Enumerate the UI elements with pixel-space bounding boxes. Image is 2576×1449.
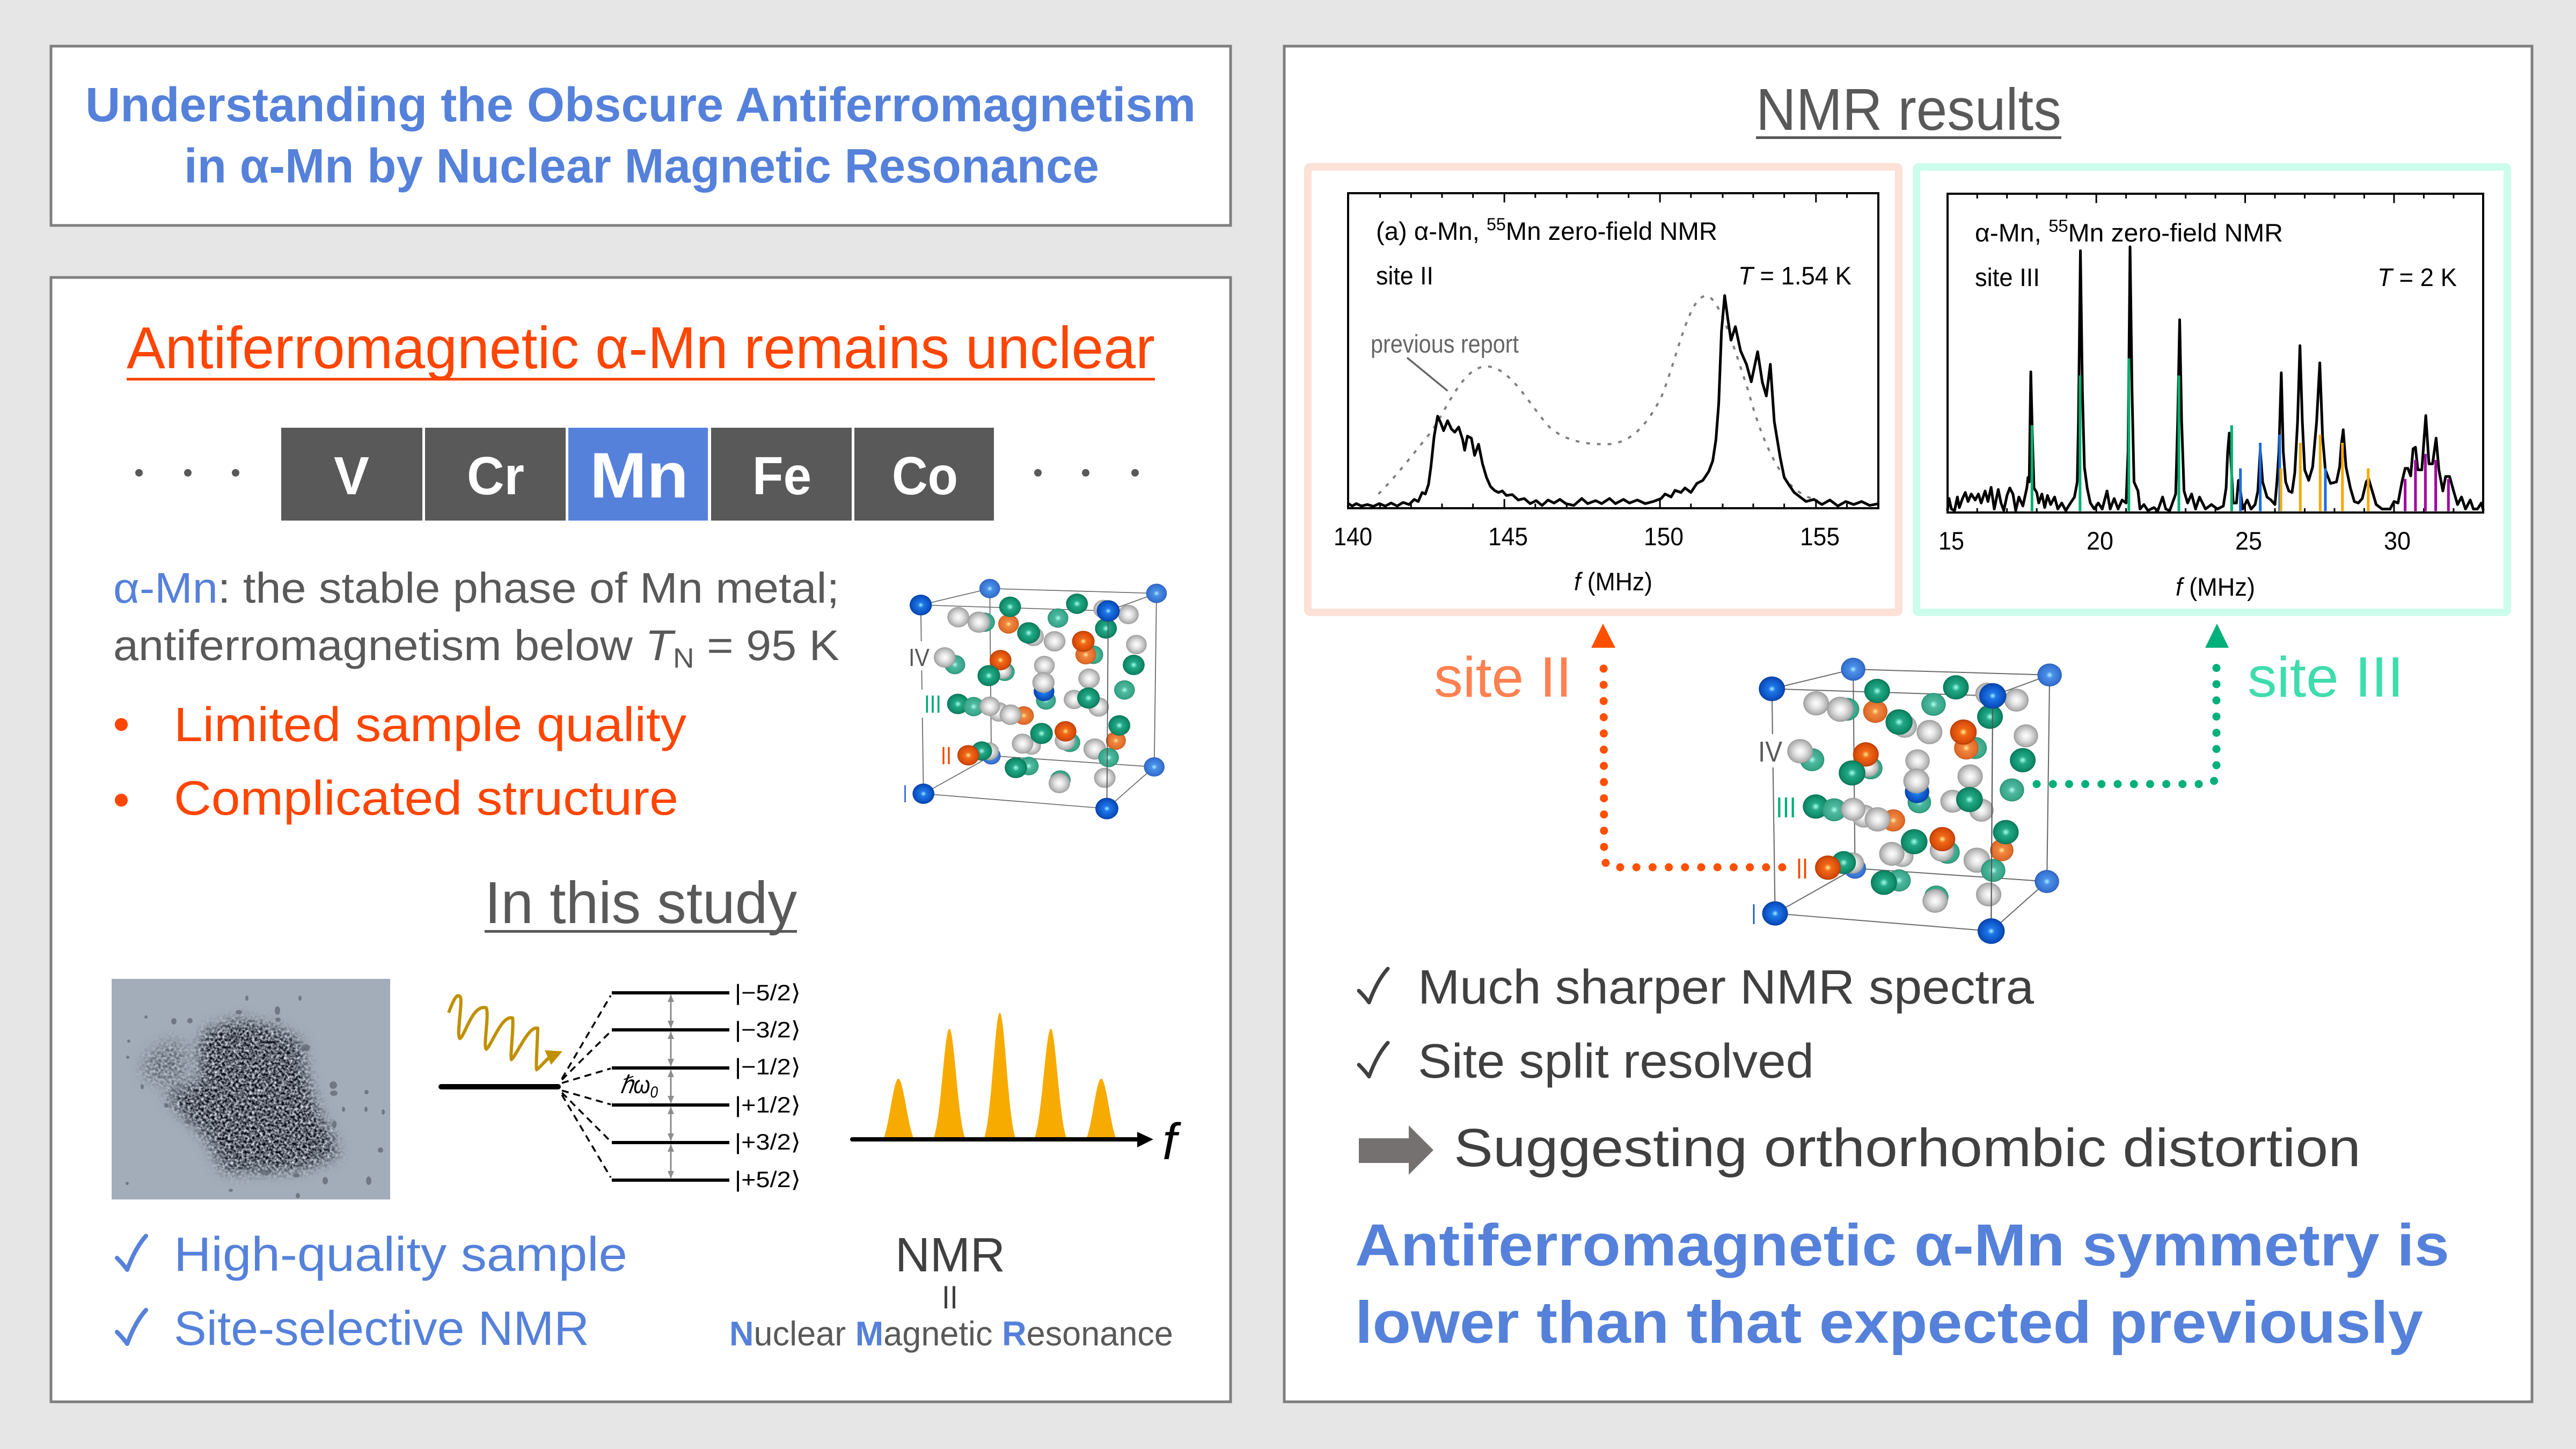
checklist: methods bbox=[117, 1228, 627, 1356]
arrow: site II to spectrum bbox=[1591, 624, 1782, 867]
dashed split lines bbox=[562, 996, 611, 1177]
arrow: conclusion bbox=[1359, 1125, 1433, 1175]
text: NMR definition: Nuclear Magnetic Resonance bbox=[729, 1314, 1173, 1353]
chart: site II spectrum: 140 bbox=[1334, 522, 1372, 551]
crystal structure: large: III bbox=[1776, 792, 1796, 824]
panel: background and study bbox=[51, 277, 1231, 1402]
calculated lines bbox=[2032, 358, 2448, 511]
text: alpha-Mn description: = 95 K bbox=[694, 621, 839, 669]
periodic table row: Fe bbox=[752, 446, 811, 506]
chart: site II spectrum: site II bbox=[1376, 261, 1433, 290]
text: alpha-Mn description bbox=[113, 564, 839, 674]
heading: title text: Understanding the Obscure Antiferromagnetism bbox=[85, 78, 1196, 132]
periodic table row: Cr bbox=[467, 446, 524, 506]
plot frame bbox=[1948, 194, 2483, 513]
chart: site II spectrum bbox=[1334, 193, 1879, 596]
chart: site III spectrum: f (MHz) bbox=[2176, 573, 2255, 601]
chart: site II spectrum: previous report bbox=[1371, 330, 1519, 358]
chart: NMR quintet peaks bbox=[850, 1013, 1181, 1170]
labels: spin states: |+3/2⟩ bbox=[735, 1129, 801, 1154]
text: alpha-Mn description: α-Mn: the stable phase of Mn metal; bbox=[113, 564, 839, 612]
checklist: results: Site split resolved bbox=[1418, 1035, 1814, 1088]
labels: spin states: |−3/2⟩ bbox=[735, 1017, 801, 1042]
chart: site III spectrum: Mn zero-field NMR bbox=[2068, 218, 2283, 247]
main level bbox=[438, 1084, 561, 1089]
chart: site II spectrum: (a) α-Mn, bbox=[1376, 217, 1479, 245]
label: site III: site III bbox=[2248, 646, 2404, 709]
crystal structure: small bbox=[903, 579, 1167, 819]
crystal structure: large: I bbox=[1752, 898, 1756, 931]
crystal structure: large bbox=[1752, 658, 2062, 944]
bullets: open issues: Complicated structure bbox=[174, 772, 678, 825]
crystal structure: large: IV bbox=[1758, 736, 1782, 768]
text: NMR definition: NMR bbox=[895, 1228, 1005, 1282]
labels: spin states bbox=[735, 980, 801, 1192]
chart: site II spectrum: T = 1.54 K bbox=[1738, 261, 1851, 290]
checklist: results bbox=[1359, 961, 2035, 1088]
chart: site III spectrum: 15 bbox=[1938, 526, 1964, 555]
text: main conclusion: lower than that expected previously bbox=[1355, 1290, 2423, 1356]
sublevels bbox=[612, 991, 729, 1182]
chart: site II spectrum: 150 bbox=[1644, 522, 1684, 551]
bullets: open issues bbox=[115, 698, 686, 825]
checklist: results: Much sharper NMR spectra bbox=[1418, 961, 2035, 1014]
chart: site III spectrum: 25 bbox=[2235, 526, 2262, 555]
frame: site II bbox=[1308, 167, 1899, 612]
text: NMR definition: II bbox=[942, 1279, 958, 1315]
heading: title text: in α-Mn by Nuclear Magnetic Resonance bbox=[184, 140, 1099, 193]
chart: site III spectrum: 55 bbox=[2048, 216, 2068, 236]
chart: site III spectrum: site III bbox=[1975, 263, 2040, 291]
labels: spin states: |+1/2⟩ bbox=[735, 1092, 801, 1117]
crystal structure: large: II bbox=[1796, 853, 1808, 885]
periodic table row: Co bbox=[892, 446, 958, 506]
chart: site III spectrum: T = 2 K bbox=[2377, 263, 2457, 291]
icon: check bbox=[117, 1310, 146, 1344]
measured spectrum bbox=[1348, 296, 1879, 506]
chart: site II spectrum: 55 bbox=[1487, 215, 1506, 234]
chart: site III spectrum: 20 bbox=[2087, 526, 2113, 555]
icon: check bbox=[1359, 1043, 1388, 1077]
bullets: open issues: Limited sample quality bbox=[174, 698, 686, 752]
labels: spin states: |−5/2⟩ bbox=[735, 980, 801, 1005]
chart: NMR quintet peaks: f bbox=[1162, 1113, 1181, 1170]
icon: check bbox=[1359, 969, 1388, 1002]
heading: NMR results: NMR results bbox=[1756, 77, 2061, 143]
heading: in this study: In this study bbox=[485, 870, 797, 936]
checklist: methods: Site-selective NMR bbox=[174, 1302, 589, 1356]
chart: site II spectrum: f (MHz) bbox=[1574, 567, 1652, 596]
labels: spin states: |+5/2⟩ bbox=[735, 1167, 801, 1192]
arrow: site III to spectrum bbox=[2037, 624, 2229, 784]
text: main conclusion: Antiferromagnetic α-Mn symmetry is bbox=[1355, 1212, 2449, 1278]
chart: site II spectrum: 145 bbox=[1488, 522, 1528, 551]
periodic table row bbox=[135, 428, 1139, 521]
labels: spin states: |−1/2⟩ bbox=[735, 1054, 801, 1079]
periodic table row: V bbox=[334, 446, 369, 506]
crystal structure: small: IV bbox=[909, 643, 930, 671]
energy level diagram bbox=[438, 980, 801, 1192]
crystal structure: small: II bbox=[941, 742, 952, 770]
photo: manganese sample bbox=[112, 979, 390, 1199]
chart: site II spectrum: Mn zero-field NMR bbox=[1506, 217, 1717, 245]
icon: check bbox=[117, 1236, 146, 1270]
heading: title text bbox=[85, 78, 1196, 193]
periodic table row: Mn bbox=[590, 440, 689, 511]
measured spectrum bbox=[1948, 247, 2483, 510]
frame: site III bbox=[1916, 167, 2507, 612]
crystal structure: small: III bbox=[924, 690, 941, 718]
text: alpha-Mn description: antiferromagnetism below T bbox=[113, 621, 671, 669]
chart: site III spectrum bbox=[1938, 194, 2483, 601]
label: site II: site II bbox=[1434, 646, 1572, 709]
label: h-bar omega: ℏω bbox=[620, 1071, 655, 1099]
report leader bbox=[1407, 358, 1447, 391]
chart: site III spectrum: α-Mn, bbox=[1975, 218, 2040, 247]
panel: NMR results bbox=[1284, 46, 2532, 1402]
chart: site II spectrum: 155 bbox=[1800, 522, 1840, 551]
label: h-bar omega: 0 bbox=[650, 1084, 658, 1101]
text: main conclusion bbox=[1355, 1212, 2449, 1356]
text: NMR definition bbox=[729, 1228, 1173, 1353]
chart: site III spectrum: 30 bbox=[2384, 526, 2411, 555]
transition arrows bbox=[670, 995, 672, 1178]
checklist: methods: High-quality sample bbox=[174, 1228, 627, 1282]
icon: radio wave arrow bbox=[449, 996, 562, 1070]
panel: title bbox=[51, 46, 1231, 225]
heading: antiferromagnetic remains unclear: Antiferromagnetic α-Mn remains unclear bbox=[127, 315, 1155, 381]
previous report curve bbox=[1379, 296, 1818, 500]
plot frame bbox=[1348, 193, 1878, 508]
crystal structure: small: I bbox=[903, 780, 907, 808]
text: orthorhombic distortion: Suggesting orthorhombic distortion bbox=[1454, 1118, 2361, 1178]
text: alpha-Mn description: N bbox=[673, 643, 694, 674]
